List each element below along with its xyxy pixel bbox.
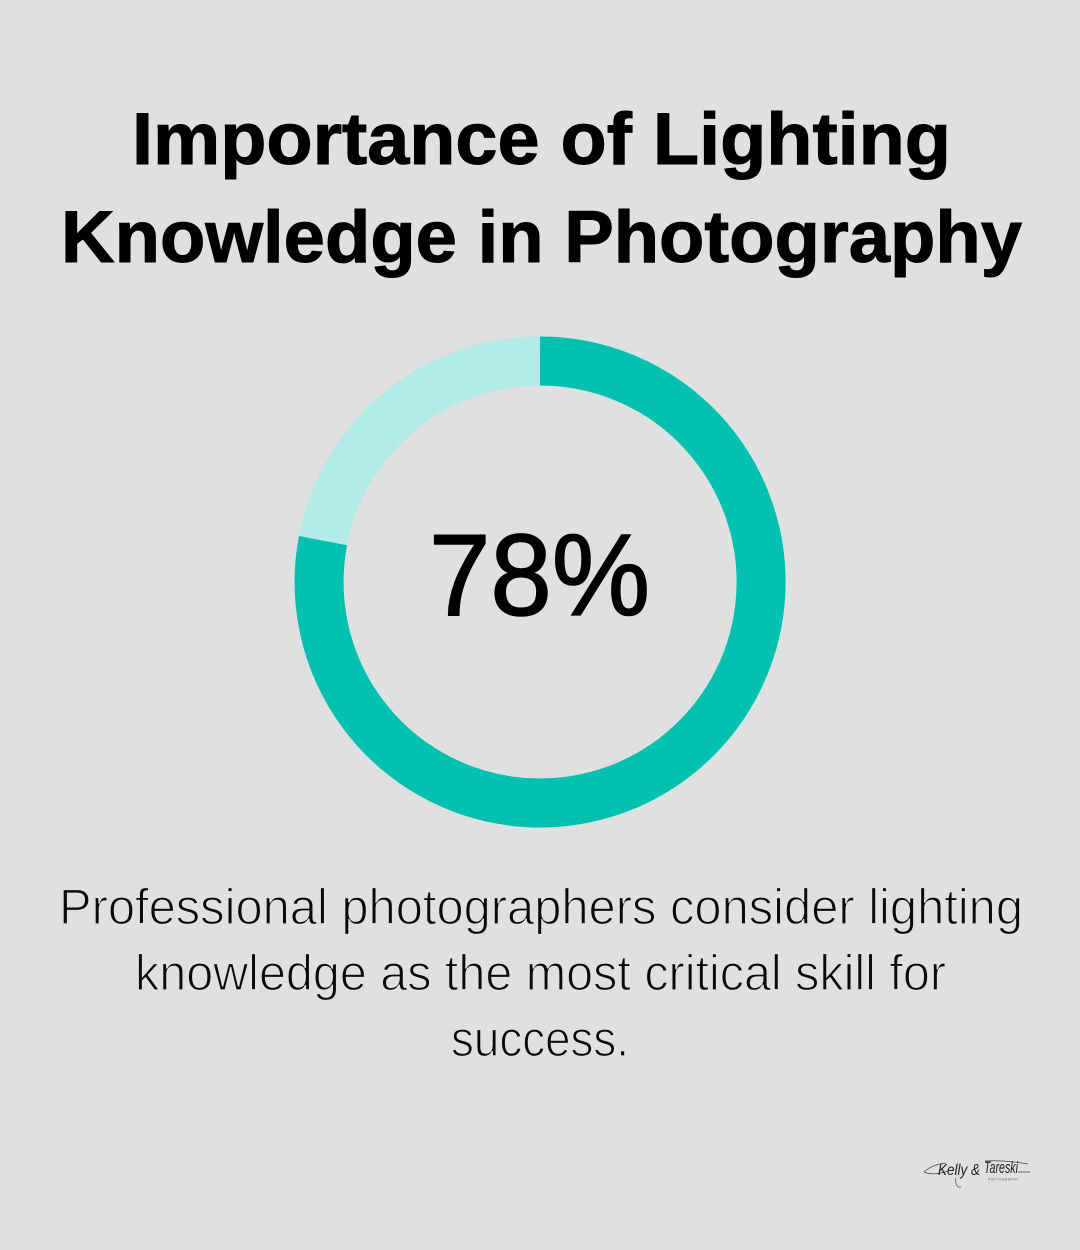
description text <box>59 879 1023 1067</box>
description text: knowledge as the most critical skill for <box>135 945 946 1001</box>
donut value arc: 78 percent <box>319 361 761 803</box>
signature logo: Tareski <box>984 1158 1019 1177</box>
signature logo: PHOTOGRAPHY <box>988 1178 1019 1182</box>
title: Knowledge in Photography <box>61 197 1022 278</box>
description text: Professional photographers consider lighting <box>59 879 1023 935</box>
title <box>61 99 1022 278</box>
donut track: remaining 22 percent <box>319 361 761 803</box>
signature logo: Kelly & <box>938 1162 980 1179</box>
signature logo <box>924 1158 1030 1187</box>
description text: success. <box>451 1011 629 1067</box>
title: Importance of Lighting <box>132 99 951 180</box>
center value: 78%: 78% <box>429 510 650 640</box>
donut chart: 78 percent <box>319 361 761 803</box>
